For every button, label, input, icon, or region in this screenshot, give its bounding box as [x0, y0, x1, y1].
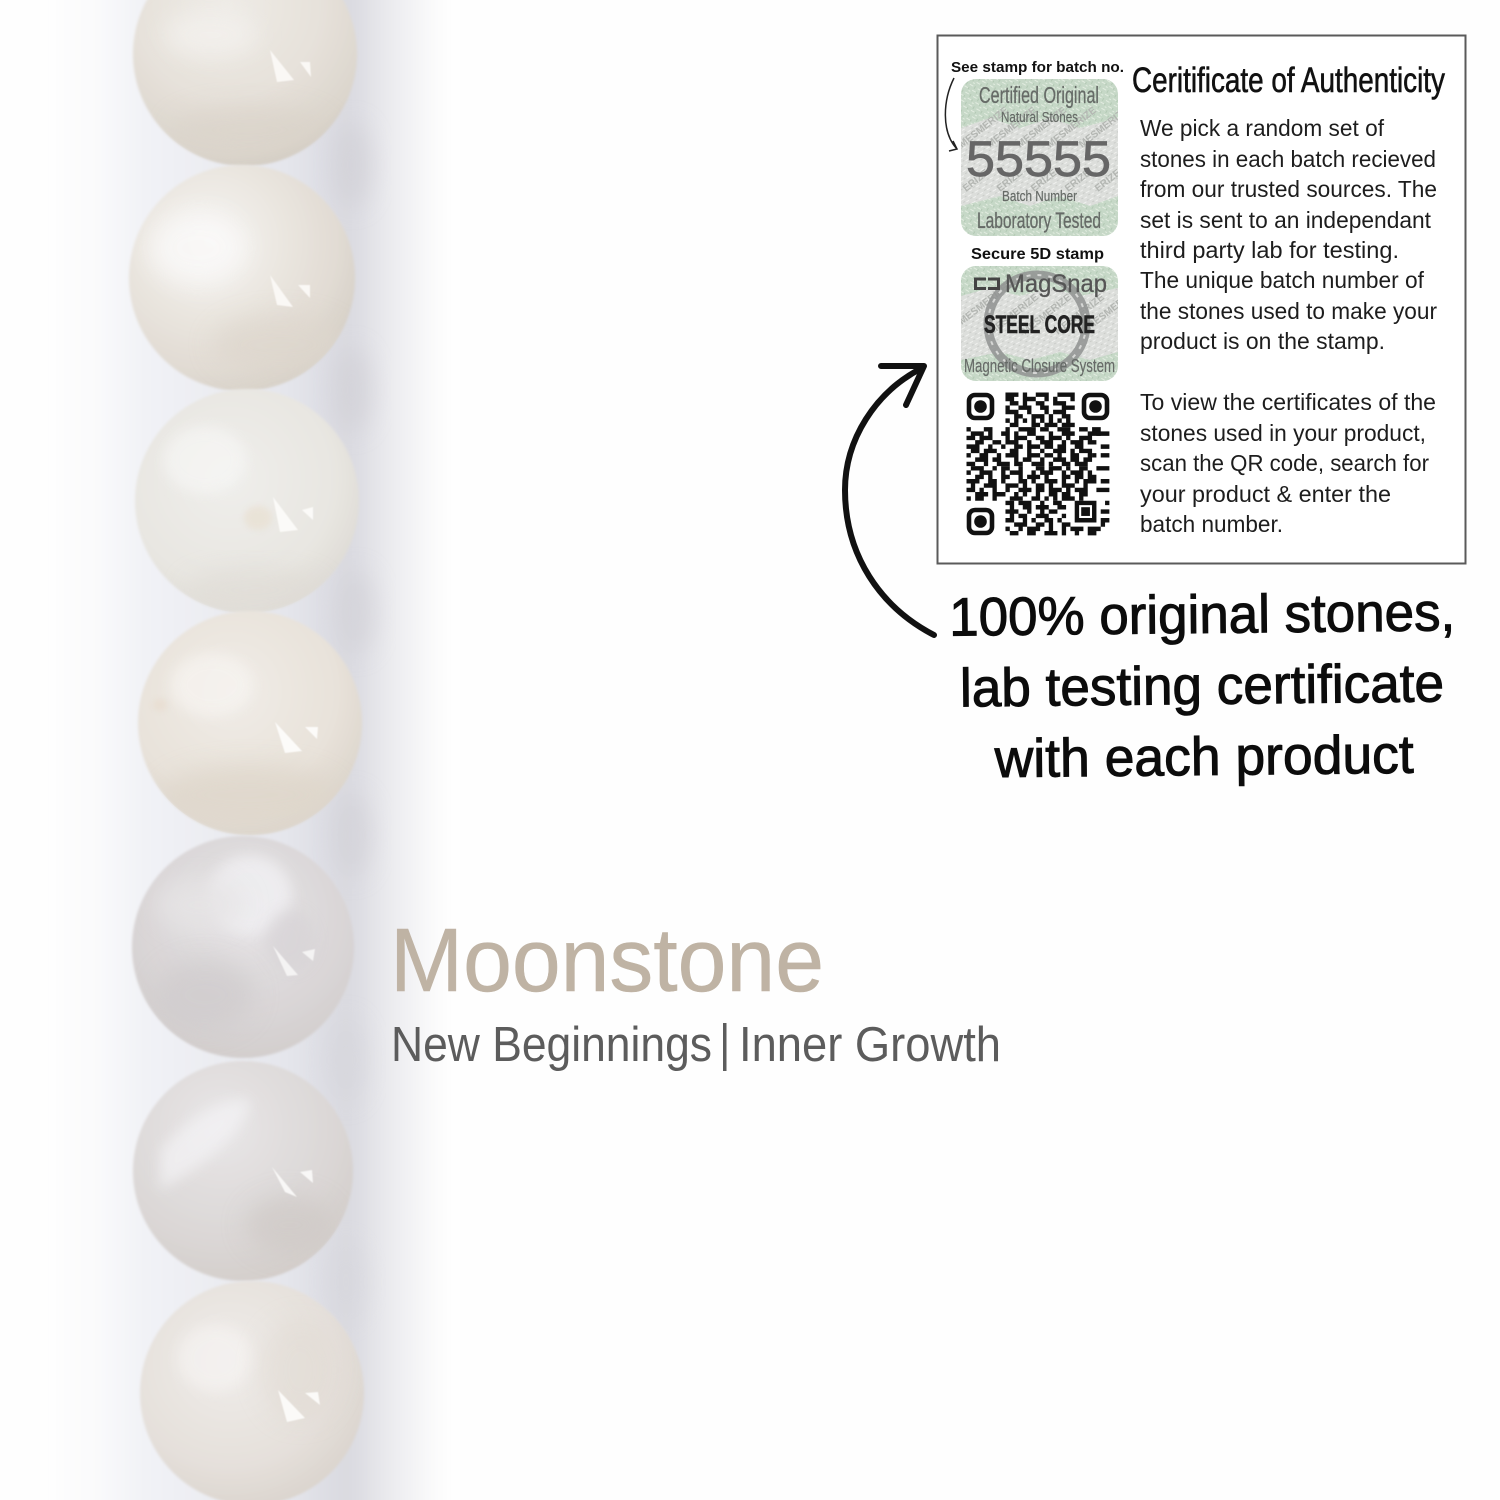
arrow: from headline to certificate stamp: [845, 366, 934, 635]
bead 6: [133, 1061, 353, 1281]
stamp: magsnap steel core: STEEL CORE: [984, 311, 1095, 339]
stamp: magsnap steel core: MagSnap: [1005, 270, 1107, 298]
stamp: certified original: MESMERIZE: [985, 105, 1039, 150]
stamp: magsnap steel core: MESMERIZE: [1020, 292, 1074, 337]
certificate body text: batch testing: The unique batch number of: [1140, 267, 1425, 293]
stamp: certified original: ERIZE: [961, 167, 991, 194]
bead strand shadow: [45, 0, 445, 1500]
icon: small curved arrow to batch number: [945, 78, 957, 151]
stamp: magsnap steel core: MESMERIZE: [957, 282, 1011, 327]
stamp: certified original: Certified Original: [979, 82, 1099, 108]
certificate body text: batch testing: [1140, 115, 1437, 354]
stamp: certified original: ERIZE: [1029, 167, 1059, 194]
certificate body text: how to view: your product & enter the: [1140, 481, 1391, 507]
headline: 100% original stones: 100% original stones,: [949, 582, 1456, 648]
certificate body text: batch testing: We pick a random set of: [1140, 115, 1385, 141]
bead 5: [132, 836, 354, 1058]
certificate body text: batch testing: the stones used to make your: [1140, 298, 1437, 324]
stamp: certified original: MESMERIZE: [1045, 105, 1099, 150]
stamp: certified original: MESMERIZE: [1077, 105, 1131, 150]
certificate body text: batch testing: stones in each batch recieved: [1140, 146, 1436, 172]
certificate body text: batch testing: product is on the stamp.: [1140, 328, 1385, 354]
stamp: certified original: ERIZE: [1093, 167, 1123, 194]
subheading: New Beginnings | Inner Growth: [391, 1018, 1001, 1072]
stamp: certified original: 55555: [966, 131, 1111, 187]
stamp: magsnap steel core: MESMERIZE: [1053, 292, 1107, 337]
certificate body text: how to view: [1140, 389, 1436, 537]
subheading: New Beginnings | Inner Growth: New Beginnings: [391, 1018, 712, 1072]
stamp: certified original: Batch Number: [1002, 188, 1077, 205]
stamp: certified original: MESMERIZE: [1015, 105, 1069, 150]
bead 1: [133, 0, 357, 166]
bead 7: [140, 1281, 364, 1500]
stamp: magsnap steel core: Magnetic Closure System: [964, 355, 1115, 376]
certificate body text: how to view: stones used in your product,: [1140, 420, 1426, 446]
moonstone bead strand: [129, 0, 364, 1500]
certificate body text: how to view: batch number.: [1140, 511, 1283, 537]
certificate body text: batch testing: from our trusted sources. The: [1140, 176, 1437, 202]
certificate body text: batch testing: set is sent to an independant: [1140, 207, 1432, 233]
stamp: certified original: Laboratory Tested: [977, 208, 1101, 233]
stamp: certified original: Natural Stones: [1001, 109, 1078, 126]
headline: 100% original stones: lab testing certificate: [960, 653, 1444, 719]
stamp: magsnap steel core: MESMERIZE: [987, 292, 1041, 337]
certificate body text: how to view: To view the certificates of the: [1140, 389, 1436, 415]
bead 4: [138, 611, 362, 835]
panel: certificate of authenticity: [938, 36, 1466, 564]
stamp: certified original: MESMERIZE: [957, 105, 1011, 150]
stamp: magsnap steel core: [961, 266, 1118, 381]
bead 3: [135, 389, 359, 613]
stamp: certified original: ERIZE: [995, 167, 1025, 194]
bead 2: [129, 165, 355, 391]
certificate body text: how to view: scan the QR code, search for: [1140, 450, 1429, 476]
stamp: certified original: [957, 79, 1131, 236]
QR code: [966, 395, 1109, 533]
headline: 100% original stones: with each product: [993, 725, 1414, 789]
label: see stamp for batch no.: See stamp for batch no.: [951, 60, 1124, 76]
label: secure 5D stamp: Secure 5D stamp: [971, 246, 1104, 263]
stamp: magsnap steel core: MESMERIZE: [1085, 287, 1139, 332]
heading: Moonstone: Moonstone: [390, 911, 824, 1011]
headline: 100% original stones: [949, 582, 1457, 790]
subheading: New Beginnings | Inner Growth: Inner Growth: [739, 1018, 1001, 1072]
certificate body text: batch testing: third party lab for testing.: [1140, 237, 1399, 263]
stamp: certified original: ERIZE: [1063, 167, 1093, 194]
